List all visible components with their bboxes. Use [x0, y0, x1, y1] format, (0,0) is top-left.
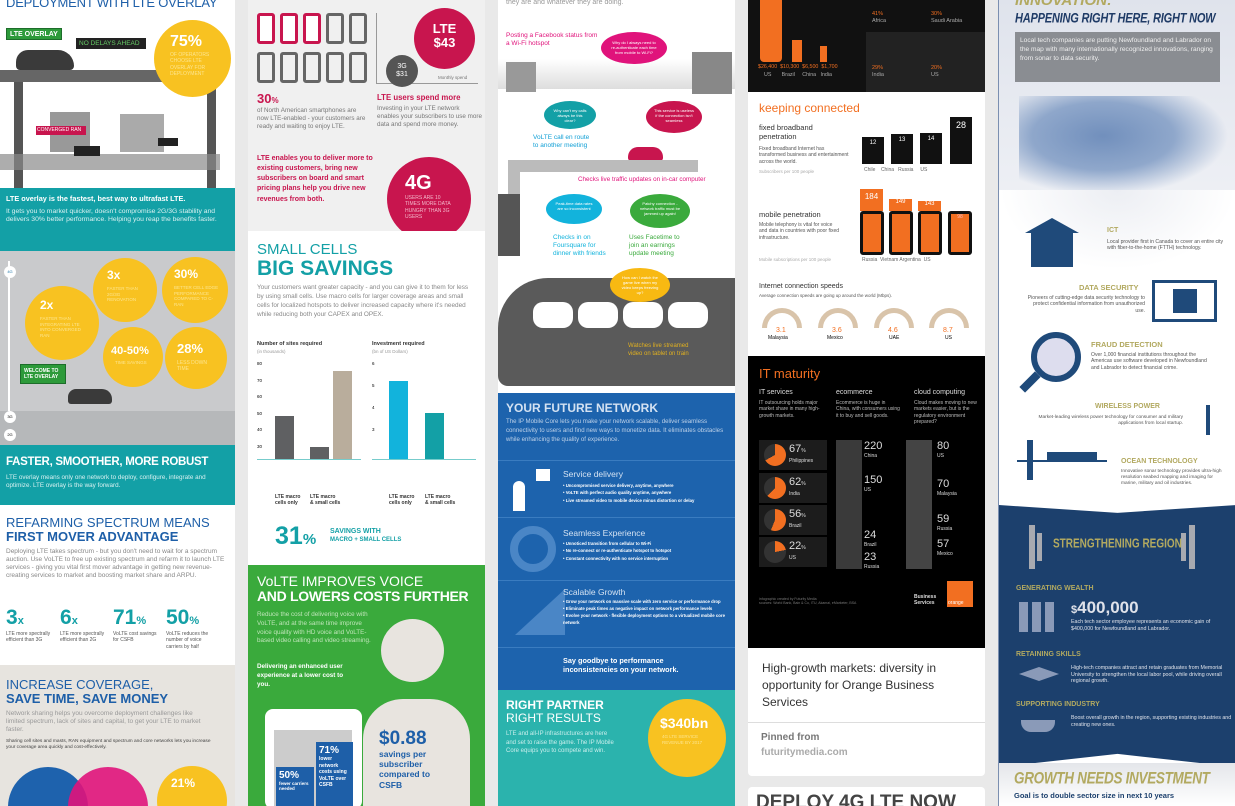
card: caption: Pinned from	[761, 732, 819, 743]
panel: keeping connected: penetration	[759, 132, 797, 141]
logo: orange business services: Business	[914, 594, 936, 600]
panel: VoLTE improves voice: Reduce the cost of delivering voice with VoLTE, and at the same time improve voice quality with HD voice and VoLTE-based video calling and video streaming.	[257, 611, 371, 644]
bar chart: number of sites: 70	[257, 378, 262, 383]
bar chart: number of sites: 60	[257, 394, 262, 399]
chart: speed gauges: UAE	[889, 335, 899, 341]
chart: LTE vs 3G monthly spend: 3G	[397, 63, 407, 70]
chart: cloud buildings: US	[937, 453, 944, 459]
chart: mobile penetration phones: Russia Vietnam Argentina US	[862, 257, 931, 263]
illustration: city journey with speech bubbles: Checks live traffic updates on in-car computer	[578, 176, 706, 183]
chart: mobile penetration phones: 143	[924, 201, 934, 207]
panel: right partner right results: RIGHT RESULTS	[506, 711, 601, 725]
chart: cloud buildings: Russia	[937, 526, 952, 532]
illustration: highway and city: LTE OVERLAY	[10, 31, 58, 38]
item: fraud detection: Over 1,000 financial institutions throughout the Americas use software developed in Newfoundland and Labrador to detect financial crime.	[1091, 352, 1207, 371]
panel: strengthening region: GENERATING WEALTH	[1016, 585, 1094, 592]
chart: cloud buildings	[906, 440, 957, 569]
icon: person silhouette with savings: compared to	[379, 769, 430, 779]
bar chart: investment: 3	[372, 427, 375, 432]
chart: LTE vs 3G monthly spend: $31	[396, 71, 408, 78]
panel: small cells big savings: & small cells	[425, 500, 455, 506]
icon: train: video on tablet on train	[628, 350, 689, 356]
item: ocean technology	[1017, 440, 1222, 486]
panel: small cells big savings: & small cells	[310, 500, 340, 506]
chart: fixed broadband routers	[862, 117, 972, 173]
illustration: city journey with speech bubbles: to another meeting	[533, 142, 587, 149]
text: LTE users spend more: Investing in your LTE network enables your subscribers to use more data and spend more money.	[377, 105, 482, 128]
chart: speed gauges: 3.1	[776, 327, 786, 334]
panel: stats circles on textured gray: 2x	[40, 298, 53, 312]
bar chart: investment	[372, 341, 476, 460]
panel: strengthening region: $400,000	[1071, 598, 1139, 617]
panel: income chart dark: US Brazil China India	[764, 72, 832, 78]
teal band: faster smoother: LTE overlay means only one network to deploy, configure, integrate and optimize. LTE overlay is the way forward.	[6, 474, 206, 489]
item: service delivery: • VoLTE with perfect audio quality anytime, anywhere	[563, 490, 671, 495]
text: LTE users spend more	[377, 93, 482, 128]
panel: your future network	[498, 393, 735, 690]
stat: 31% savings	[275, 522, 402, 550]
chart: ecommerce towers: 23	[864, 551, 876, 563]
panel: refarming spectrum: Deploying LTE takes spectrum - but you don't need to wait for a spectrum auction. Use VoLTE to free up existing spectrum and refarm it to launch LTE services - giving you vital first mover advantage in getting new revenue-creating services to market and boosting market share and ARPU.	[6, 548, 224, 579]
chart: fixed broadband routers: 14	[928, 136, 934, 142]
column 3: IP mobile core journey	[498, 0, 735, 806]
panel: keeping connected: Internet connection speeds	[759, 283, 843, 290]
illustration: city journey with speech bubbles: VoLTE call en route	[533, 134, 589, 141]
panel: your future network: Say goodbye to performance	[563, 656, 664, 665]
illustration: city journey with speech bubbles: Peak-time data rates are so inconsistent	[556, 201, 592, 211]
bar chart: investment: 5	[372, 383, 375, 388]
panel: increase coverage: SAVE TIME, SAVE MONEY	[6, 691, 168, 706]
panel: small cells big savings: SMALL CELLS	[257, 241, 357, 258]
panel: small cells big savings: cells only	[275, 500, 298, 506]
illustration: city journey with speech bubbles: update meeting	[629, 250, 674, 257]
bar chart: number of sites: 80	[257, 361, 262, 366]
icon: person silhouette with savings	[363, 619, 470, 806]
panel: strengthening region: Boost overall growth in the region, supporting existing industries and creating new ones.	[1071, 715, 1231, 728]
chart: ecommerce towers	[836, 440, 882, 570]
chart: IT services pies	[759, 440, 827, 567]
chart: IT services pies: 22%	[789, 540, 806, 552]
panel: right partner right results: LTE and all-IP infrastructures are here and set to raise the game. The IP Mobile Core equips you to compete and win.	[506, 731, 614, 754]
callout: 75% yellow circle: 75%	[170, 33, 202, 50]
chart: ecommerce towers: US	[864, 487, 871, 493]
item: wireless power	[1038, 403, 1210, 435]
panel: IT maturity: cloud computing	[914, 389, 965, 396]
chart: IT services pies: India	[789, 491, 800, 497]
bar chart: number of sites: (in thousands)	[257, 349, 286, 354]
panel: stats circles on textured gray: TIME SAVINGS	[115, 360, 147, 365]
panel: stats circles on textured gray: 4G	[7, 269, 13, 274]
column 2: LTE spend / small cells / VoLTE	[248, 0, 485, 806]
card: caption: futuritymedia.com	[761, 747, 848, 758]
panel: VoLTE improves voice	[248, 565, 485, 806]
panel: IT maturity: sources: World Bank, Bain & Co, ITU, Akamai, eMarketer, BSA	[759, 601, 856, 605]
chart: ecommerce towers: China	[864, 453, 877, 459]
chart: speed gauges: 8.7	[943, 327, 953, 334]
illustration: city journey with speech bubbles	[498, 32, 735, 386]
chart: speed gauges	[762, 308, 969, 341]
chart: speed gauges: 4.6	[888, 327, 898, 334]
panel: strengthening region: High-tech companies attract and retain graduates from Memorial University to strengthen the local labor pool, while driving overall regional growth.	[1071, 665, 1222, 684]
chart: mobile penetration phones: 98	[957, 214, 963, 220]
chart: IT services pies: 56%	[789, 508, 806, 520]
item: scalable growth	[515, 587, 725, 635]
icon: phone with bar stats: lower network costs using VoLTE over CSFB	[319, 756, 347, 788]
chart: ecommerce towers: 220	[864, 440, 882, 452]
footer: growth needs investment	[999, 763, 1235, 806]
callout: 4G circle: USERS ARE 10 TIMES MORE DATA HUNGRY THAN 3G USERS	[405, 195, 450, 220]
panel: VoLTE improves voice: VoLTE IMPROVES VOICE	[257, 573, 423, 589]
bar chart: number of sites: 40	[257, 427, 262, 432]
panel: IT maturity: infographic created by Futurity Media	[759, 597, 817, 601]
icon grid: smartphones	[257, 13, 367, 83]
panel: strengthening region: SUPPORTING INDUSTRY	[1016, 701, 1100, 708]
item: fraud detection	[1020, 332, 1207, 393]
chart: IT services pies: Brazil	[789, 523, 802, 529]
icon: person silhouette with savings: savings per	[379, 749, 426, 759]
footer: growth needs investment: GROWTH NEEDS INVESTMENT	[1014, 769, 1210, 787]
teal band: faster smoother: FASTER, SMOOTHER, MORE ROBUST	[6, 456, 208, 468]
chart: IT services pies: 62%	[789, 476, 806, 488]
stat: 31% savings: 31%	[275, 522, 316, 550]
chart: cloud buildings: 70	[937, 478, 949, 490]
callout: 75% yellow circle	[154, 20, 231, 97]
item: data security: Pioneers of cutting-edge data security technology to protect confidential information from unauthorized use.	[1028, 295, 1145, 314]
panel: strengthening region	[999, 505, 1235, 767]
panel: increase coverage: Sharing cell sites and masts, RAN equipment and spectrum and core networks lets you increase your coverage area quickly and cost-effectively.	[6, 739, 211, 750]
illustration: city journey with speech bubbles: dinner with friends	[553, 250, 606, 257]
panel: stats circles on textured gray	[0, 251, 235, 445]
illustration: city journey with speech bubbles: join an earnings	[629, 242, 675, 249]
panel: increase coverage: Network sharing helps you overcome deployment challenges like limited spectrum, lack of sites and capital, to get your LTE to market faster.	[6, 710, 201, 733]
illustration: city journey with speech bubbles: How can I watch the game live when my video keeps freezing up?	[622, 275, 658, 295]
icon: phone with bar stats: 50%	[279, 770, 299, 781]
panel: stats circles on textured gray: FASTER THAN INTEGRATING LTE INTO CONVERGED RAN	[40, 316, 81, 338]
panel: IT maturity: IT services	[759, 389, 793, 396]
chart: cloud buildings: 80	[937, 440, 949, 452]
panel: keeping connected: Average connection speeds are going up around the world (Mbps).	[759, 293, 892, 298]
chart: cloud buildings: Malaysia	[937, 491, 957, 497]
panel: small cells big savings: LTE macro	[389, 494, 414, 500]
panel: income chart dark: India	[872, 72, 884, 78]
panel: income chart dark	[748, 0, 985, 92]
item: seamless experience: • Unnoticed transition from cellular to Wi-Fi	[563, 541, 651, 546]
stat: 31% savings: SAVINGS WITH	[330, 528, 381, 535]
panel: IT maturity: Ecommerce is huge in China, with consumers using it to buy and sell goods.	[836, 400, 900, 418]
panel: increase coverage	[0, 665, 235, 806]
illustration: city journey with speech bubbles: Why do I always need to re-authenticate each time from mobile to Wi-Fi?	[611, 40, 657, 55]
panel: income chart dark: Saudi Arabia	[931, 18, 962, 24]
panel: refarming spectrum: 3x	[6, 606, 24, 629]
item: ocean technology: OCEAN TECHNOLOGY	[1121, 458, 1198, 465]
panel: your future network: inconsistencies on your network.	[563, 665, 679, 674]
column 4: Orange business services card	[748, 0, 985, 806]
chart: LTE vs 3G monthly spend: Monthly spend	[438, 75, 467, 80]
panel: stats circles on textured gray: 3x	[107, 268, 120, 282]
panel: VoLTE improves voice: Delivering an enhanced user experience at a lower cost to you.	[257, 663, 343, 688]
panel: keeping connected: Mobile subscriptions per 100 people	[759, 257, 831, 262]
card: caption: High-growth markets: diversity in opportunity for Orange Business Services	[762, 661, 936, 709]
chart: fixed broadband routers: 12	[870, 140, 876, 146]
text: 30% smartphones: of North American smartphones are now LTE-enabled - your customers are ready and waiting to enjoy LTE.	[257, 107, 365, 130]
text: LTE enables delivery: LTE enables you to deliver more to existing customers, bring new subscribers on board and smart pricing plans help you drive new revenues from both.	[257, 155, 373, 203]
item: seamless experience: • Constant connectivity with no service interruption	[563, 556, 668, 561]
panel: IT maturity: Cloud makes moving to new markets easier, but is the regulatory environment prepared?	[914, 400, 977, 425]
bar chart: number of sites	[257, 341, 361, 460]
column 5: Newfoundland innovation	[998, 0, 1235, 806]
chart: speed gauges: Malaysia	[768, 335, 788, 341]
bar chart: number of sites: 30	[257, 444, 262, 449]
panel: your future network: The IP Mobile Core lets you make your network scalable, deliver seamless connectivity to users and find new ways to monetize data. It eliminates obstacles while enhancing the quality of experience.	[506, 418, 723, 443]
bar chart: investment: 6	[372, 361, 375, 366]
icon: person silhouette with savings: subscriber	[379, 759, 422, 769]
column 1: LTE overlay infographic	[0, 0, 235, 806]
header: innovation	[999, 0, 1235, 200]
chart: cloud buildings: 57	[937, 538, 949, 550]
panel: small cells big savings: cells only	[389, 500, 412, 506]
panel: strengthening region: STRENGTHENING REGION	[1053, 537, 1182, 551]
teal band: LTE overlay fastest: LTE overlay is the fastest, best way to ultrafast LTE.	[6, 194, 185, 203]
bar chart: number of sites: Number of sites required	[257, 341, 322, 347]
panel: income chart dark: US	[931, 72, 939, 78]
icon: person silhouette with savings: CSFB	[379, 780, 402, 790]
illustration: city journey with speech bubbles: Checks in on	[553, 234, 591, 241]
footer: growth needs investment: Goal is to double sector size in next 10 years	[1014, 791, 1174, 800]
chart: fixed broadband routers: Chile China Russia US	[864, 167, 927, 173]
chart: ecommerce towers: 24	[864, 529, 876, 541]
panel: income chart dark: 41%	[872, 11, 883, 17]
panel: keeping connected: mobile penetration	[759, 210, 821, 219]
chart: mobile penetration phones: 184	[865, 192, 878, 201]
panel: IT maturity: ecommerce	[836, 389, 873, 396]
panel: keeping connected: Subscribers per 100 people	[759, 169, 814, 174]
panel: IT maturity: IT maturity	[759, 366, 820, 381]
item: seamless experience	[510, 526, 672, 572]
icon: person silhouette with savings: $0.88	[379, 728, 427, 749]
illustration: highway and city: NO DELAYS AHEAD	[79, 40, 140, 47]
chart: IT services pies: 67%	[789, 443, 806, 455]
chart: fixed broadband routers: 28	[956, 120, 966, 130]
illustration: city journey with speech bubbles: Foursquare for	[553, 242, 596, 249]
panel: refarming spectrum: 6x	[60, 606, 78, 629]
panel: stats circles on textured gray: 28%	[177, 341, 203, 356]
panel: small cells big savings: Your customers want greater capacity - and you can give it to them for less by using small cells. Use macro cells for larger coverage areas and small cells for localized hotspots to deliver increased capacity where it's needed while reducing both your CAPEX and OPEX.	[257, 284, 468, 318]
text: 30% smartphones: 30%	[257, 91, 279, 106]
callout: 4G circle	[387, 157, 471, 241]
panel: refarming spectrum: FIRST MOVER ADVANTAGE	[6, 529, 178, 544]
panel: your future network: YOUR FUTURE NETWORK	[506, 401, 658, 415]
panel: stats circles on textured gray: 30%	[174, 267, 198, 281]
header: innovation: HAPPENING RIGHT HERE, RIGHT NOW	[1015, 11, 1215, 26]
illustration: highway and city: CONVERGED RAN	[37, 127, 81, 133]
panel: stats circles on textured gray: BETTER CELL EDGE PERFORMANCE COMPARED TO C-RAN	[174, 285, 218, 307]
panel: income chart dark: Africa	[872, 18, 886, 24]
panel: income chart dark: $26,400 $10,300 $6,500 $1,700	[758, 64, 838, 70]
icon: phone with bar stats	[265, 709, 362, 806]
chart: LTE vs 3G monthly spend: $43	[434, 35, 455, 50]
item: service delivery: Service delivery	[563, 469, 623, 479]
panel: refarming spectrum: VoLTE reduces the number of voice carriers by half	[166, 631, 208, 650]
panel: right partner right results: 4G LTE SERVICE REVENUE BY 2017	[662, 734, 702, 745]
panel: keeping connected	[748, 92, 985, 356]
panel: income chart dark: 29%	[872, 65, 883, 71]
panel: strengthening region: RETAINING SKILLS	[1016, 651, 1081, 658]
illustration: city journey with speech bubbles: Patchy connection - network traffic must be jammed up again!	[640, 201, 680, 216]
item: ICT	[1025, 218, 1223, 267]
item: service delivery: • Live streamed video to mobile device minus distortion or delay	[563, 498, 694, 503]
panel: keeping connected: Mobile telephony is vital for voice and data in countries with poor fixed infrastructure.	[759, 222, 839, 240]
chart: speed gauges: US	[945, 335, 952, 341]
item: ICT: ICT	[1107, 227, 1118, 234]
panel: refarming spectrum: 50%	[166, 606, 199, 629]
panel: refarming spectrum: LTE more spectrally efficient than 3G	[6, 631, 50, 643]
illustration: highway and city	[0, 28, 220, 188]
panel: VoLTE improves voice: AND LOWERS COSTS FURTHER	[257, 588, 468, 604]
panel: strengthening region: Each tech sector employee represents an economic gain of $400,000 for Newfoundland and Labrador.	[1071, 619, 1210, 632]
teal band: LTE overlay fastest: It gets you to market quicker, doesn't compromise 2G/3G stability and delivers 30% better performance. Helping you reap the benefits faster.	[6, 208, 217, 223]
item: fraud detection: FRAUD DETECTION	[1091, 340, 1163, 349]
chart: speed gauges: Mexico	[827, 335, 843, 341]
panel: small cells big savings: LTE macro	[275, 494, 300, 500]
chart: IT services pies: Philippines	[789, 458, 813, 464]
item: ocean technology: Innovative sonar technology provides ultra-high resolution seabed mapping and imaging for marine, military and oil industries.	[1121, 469, 1222, 486]
panel: keeping connected: Fixed broadband Internet has transformed business and entertainment across the world.	[759, 146, 848, 164]
illustration: city journey with speech bubbles: Posting a Facebook status from a Wi-Fi hotspot	[506, 32, 597, 47]
icon: train	[498, 278, 735, 386]
chart: speed gauges: 3.6	[832, 327, 842, 334]
text: LTE users spend more: LTE users spend more	[377, 93, 460, 102]
illustration: city journey with speech bubbles: This service is useless if the connection isn't seamless	[654, 108, 694, 123]
panel: small cells big savings	[248, 231, 485, 565]
logo: orange business services: orange	[948, 600, 964, 606]
panel: stats circles on textured gray: LESS DOWN TIME	[177, 360, 207, 372]
panel: small cells big savings: BIG SAVINGS	[257, 257, 393, 280]
panel: income chart dark: 20%	[931, 65, 942, 71]
bar chart: investment: (bn of US Dollars)	[372, 349, 408, 354]
chart: ecommerce towers: Russia	[864, 564, 879, 570]
panel: right partner right results	[498, 690, 735, 806]
chart: IT services pies: US	[789, 555, 796, 561]
callout: 75% yellow circle: OF OPERATORS CHOOSE LTE OVERLAY FOR DEPLOYMENT	[170, 52, 209, 77]
panel: small cells big savings: LTE macro	[310, 494, 335, 500]
icon: train: Watches live streamed	[628, 343, 688, 349]
panel: refarming spectrum: LTE more spectrally efficient than 2G	[60, 631, 104, 643]
chart: cloud buildings: 59	[937, 513, 949, 525]
chart: LTE vs 3G monthly spend	[376, 8, 478, 87]
panel: stats circles on textured gray: 3G	[7, 414, 13, 419]
text: 30% smartphones	[257, 91, 366, 130]
panel: right partner right results: RIGHT PARTNER	[506, 698, 604, 712]
card: caption	[748, 648, 985, 776]
chart: cloud buildings: Mexico	[937, 551, 953, 557]
callout: 4G circle: 4G	[405, 172, 432, 194]
bar chart: investment: 4	[372, 405, 375, 410]
logo: orange business services	[914, 581, 973, 607]
item: scalable growth: Scalable Growth	[563, 587, 625, 597]
item: service delivery: • Uncompromised service delivery, anytime, anywhere	[563, 483, 674, 488]
panel: right partner right results: $340bn	[660, 715, 708, 731]
item: data security: DATA SECURITY	[1079, 283, 1138, 292]
panel: IT maturity: IT outsourcing holds major market share in many high-growth markets.	[759, 400, 820, 418]
map: dotted world	[1019, 96, 1229, 196]
header: innovation: Local tech companies are putting Newfoundland and Labrador on the map with many internationally recognized innovations, ranging from sonar to data security.	[1020, 37, 1213, 62]
icon: phone with bar stats: 71%	[319, 745, 339, 756]
item: service delivery	[513, 469, 694, 511]
teal band: faster smoother	[0, 445, 235, 505]
item: ICT: Local provider first in Canada to cover an entire city with fiber-to-the-home (FTTH) technology.	[1107, 239, 1223, 251]
panel: stats circles on textured gray: WELCOME TO LTE OVERLAY	[24, 368, 58, 380]
panel: IT maturity	[748, 356, 985, 648]
logo: orange business services: Services	[914, 600, 935, 606]
item: wireless power: WIRELESS POWER	[1095, 403, 1160, 410]
teal band: LTE overlay fastest	[0, 188, 235, 251]
chart: ecommerce towers: 150	[864, 474, 882, 486]
bar chart: investment: Investment required	[372, 341, 425, 347]
panel: refarming spectrum: REFARMING SPECTRUM MEANS	[6, 515, 210, 530]
chart: LTE vs 3G monthly spend: LTE	[433, 21, 456, 36]
item: scalable growth: • Eliminate peak times as negative impact on network performance levels	[563, 606, 712, 611]
item: scalable growth: • Evolve your network - flexible deployment options to a virtualized mobile core network	[563, 613, 725, 625]
icon: phone with bar stats: fewer carriers needed	[279, 781, 309, 791]
chart: mobile penetration phones	[860, 189, 972, 263]
panel: refarming spectrum	[0, 505, 235, 665]
panel: refarming spectrum: 71%	[113, 606, 146, 629]
chart: ecommerce towers: Brazil	[864, 542, 877, 548]
chart: fixed broadband routers: 13	[899, 137, 905, 143]
panel: keeping connected: fixed broadband	[759, 123, 813, 132]
item: seamless experience: Seamless Experience	[563, 528, 645, 538]
card: deploy 4G LTE now	[748, 787, 985, 806]
panel: stats circles on textured gray: 2G	[7, 432, 13, 437]
panel: keeping connected: keeping connected	[759, 101, 860, 115]
panel: increase coverage: 21%	[171, 776, 195, 790]
panel: income chart dark: 30%	[931, 11, 942, 17]
panel: increase coverage: INCREASE COVERAGE,	[6, 677, 153, 692]
item: wireless power: Market-leading wireless power technology for consumer and military applications from local startup.	[1038, 415, 1183, 426]
bar chart: number of sites: 50	[257, 411, 262, 416]
illustration: city journey with speech bubbles: Why can't my calls always be this clear?	[554, 108, 586, 123]
stat: 31% savings: MACRO + SMALL CELLS	[330, 537, 401, 543]
item: data security	[1028, 280, 1217, 322]
panel: small cells big savings: LTE macro	[425, 494, 450, 500]
item: scalable growth: • Grow your network on massive scale with zero service or performance drop	[563, 599, 721, 604]
panel: refarming spectrum: VoLTE cost savings for CSFB	[113, 631, 157, 643]
panel: stats circles on textured gray: 40-50%	[111, 345, 149, 357]
chart: mobile penetration phones: 149	[895, 199, 906, 205]
illustration: city journey with speech bubbles: Uses Facetime to	[629, 234, 680, 241]
panel: stats circles on textured gray: FASTER THAN 2G/3G RENOVATION	[107, 286, 138, 302]
item: seamless experience: • No re-connect or re-authenticate hotspot to hotspot	[563, 548, 671, 553]
